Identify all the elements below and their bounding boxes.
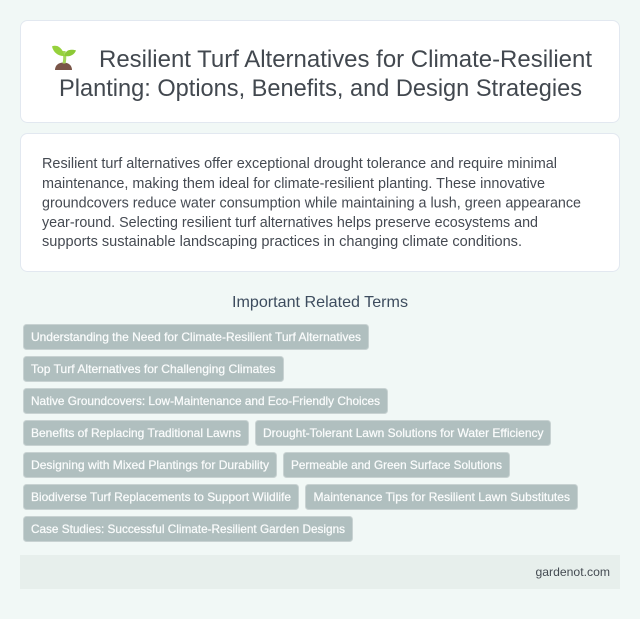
tag [24, 420, 248, 446]
tag [24, 484, 298, 510]
text block: description: groundcovers reduce water consumption while maintaining a lush, green appearance [42, 196, 581, 212]
panel: description card [20, 134, 620, 272]
tag: Native Groundcovers: Low-Maintenance and Eco-Friendly Choices [31, 394, 380, 408]
text block: description: Resilient turf alternatives offer exceptional drought tolerance and require minimal [42, 156, 557, 172]
tag [24, 324, 368, 350]
tag: Biodiverse Turf Replacements to Support Wildlife [31, 490, 291, 504]
heading: important related terms: Important Related Terms [232, 294, 408, 311]
panel: title card [20, 20, 620, 122]
footer [20, 555, 620, 589]
tag [24, 356, 284, 382]
tag: Case Studies: Successful Climate-Resilient Garden Designs [31, 522, 345, 536]
tag [256, 420, 550, 446]
text block: description: year-round. Selecting resilient turf alternatives helps preserve ecosystems and [42, 215, 538, 231]
tag [284, 452, 510, 478]
tag: Maintenance Tips for Resilient Lawn Substitutes [314, 490, 570, 504]
title: Resilient Turf Alternatives for Climate-Resilient [99, 46, 592, 73]
tag list: related terms [24, 324, 578, 542]
tag: Permeable and Green Surface Solutions [291, 458, 502, 472]
tag [24, 516, 352, 542]
title: Planting: Options, Benefits, and Design Strategies [59, 75, 582, 102]
text block: description [42, 156, 581, 250]
text block: description: maintenance, making them ideal for climate-resilient planting. These innovative [42, 176, 545, 192]
text block: description: supports sustainable landscaping practices in changing climate conditions. [42, 234, 522, 250]
tag [24, 388, 388, 414]
tag: Benefits of Replacing Traditional Lawns [31, 426, 241, 440]
tag [306, 484, 578, 510]
title [59, 46, 592, 102]
tag [24, 452, 276, 478]
tag: Understanding the Need for Climate-Resilient Turf Alternatives [31, 330, 361, 344]
footer text: gardenot.com [536, 565, 610, 579]
icon: seedling [52, 46, 76, 70]
tag: Designing with Mixed Plantings for Durability [31, 458, 269, 472]
tag: Drought-Tolerant Lawn Solutions for Water Efficiency [263, 426, 544, 440]
tag: Top Turf Alternatives for Challenging Climates [31, 362, 276, 376]
